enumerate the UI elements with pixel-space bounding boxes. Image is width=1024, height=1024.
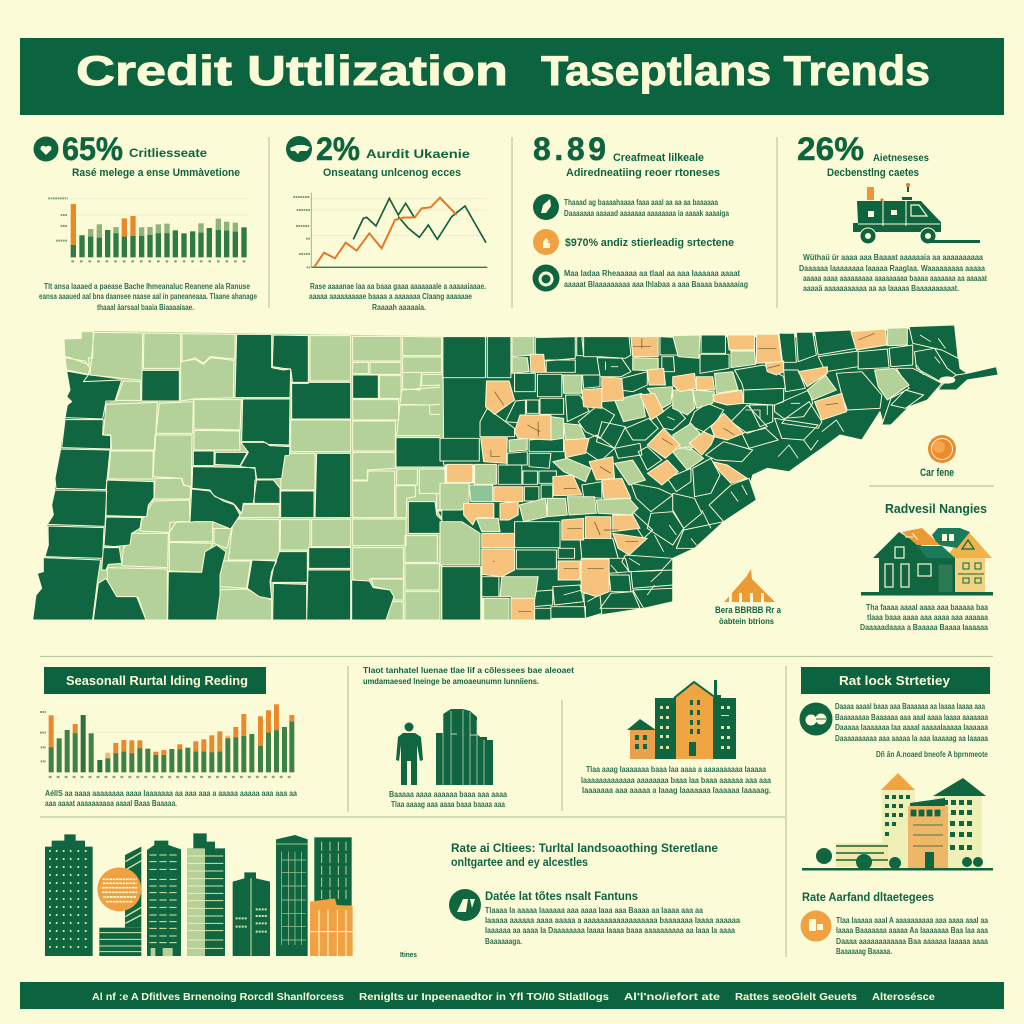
description: thaaal äarsaal baaia Biaaaaiaae. xyxy=(97,303,194,312)
description: Iaaaa Baaaaaaa aaaaa Aa Iaaaaaaa Baa Iaa aaa xyxy=(836,926,988,935)
heading: Rate ai Cltiees: Turltal landsoaothing Steretlane xyxy=(451,843,718,855)
heading bar: Rat lock Strtetiey xyxy=(839,673,951,688)
subtitle: Onseatang unlcenog ecces xyxy=(323,167,461,179)
description xyxy=(389,790,507,809)
stat heading: 26% xyxy=(797,131,864,167)
stat heading xyxy=(316,131,470,167)
stat heading xyxy=(533,131,704,167)
footer banner: Al nf :e A Dfitlves Brnenoing Rorcdl Shanlforcess xyxy=(92,991,344,1003)
icon: leaf badge xyxy=(449,889,481,921)
description: Iaaaaaa aa aaaa Ia Daaaaaaaa Iaaaa Iaaaa baaa aaaaaaaaaa aa Iaaa Ia aaaa xyxy=(485,926,735,935)
description: Iaaaaa aaaaaa aaaa aaaaa a aaaaaaaaaaaaaaaaaa baaaaaaa Iaaaa aaaaaa xyxy=(485,916,740,925)
description: Raaaah aaaaaia. xyxy=(372,303,426,312)
description xyxy=(581,765,771,795)
item: leaf note: Daaaaaaa aaaaad aaaaaaa aaaaaaaa ia aaaak aaaaiga xyxy=(564,209,729,218)
description: Baaaaaaga. xyxy=(485,937,522,946)
icon: apartment block xyxy=(627,680,736,759)
description: tlaaa baaa aaaa aaa aaaa aaa aaaaaa xyxy=(867,613,988,622)
item: leaf note: Thaaad ag baaaahaaaa faaa aaal aa aa aa baaaaaa xyxy=(564,198,718,207)
panel: 2% statistic xyxy=(286,131,487,312)
footer banner xyxy=(20,982,1004,1009)
icon: orange pavilion xyxy=(724,569,775,602)
tower E xyxy=(233,872,270,956)
heading bar xyxy=(801,667,990,694)
heading bar: Seasonall Rurtal lding Reding xyxy=(66,673,248,688)
stat heading: 8.89 xyxy=(533,131,606,167)
heading xyxy=(451,843,718,869)
footer banner: Reniglts ur Inpeenaedtor in Yfl TO/I0 Stlatllogs xyxy=(359,991,609,1003)
stat heading: Critliesseate xyxy=(129,146,207,160)
note: Dñ ān A.noaed bneofe A bprnmeote xyxy=(876,750,988,759)
description: Iaaaaaaa aaa aaaaa a Iaaag Iaaaaaaa Iaaaaaa Iaaaaag. xyxy=(582,786,771,795)
caption: emblem: Car fene xyxy=(920,467,954,479)
intro text: umdamaesed lneinge be amoaeunumn lunniiens. xyxy=(363,676,539,686)
title banner xyxy=(20,38,1004,115)
stat heading xyxy=(797,131,929,167)
caption: pavilion xyxy=(715,605,782,626)
description: aaaaä aaaaaaaaaaa aa aa Iaaaaa Baaaaaaaaaat. xyxy=(803,284,959,293)
description: aaaaa aaaaaaaaae baaaa a aaaaaaa Claang aaaaaae xyxy=(309,292,472,301)
panel: seasonal trending xyxy=(40,667,297,808)
choropleth map xyxy=(33,325,998,620)
description: Daaaa aaaaaaaaaaaa Baa aaaaaa Iaaaaa aaaa xyxy=(836,937,988,946)
icon: campus buildings xyxy=(802,773,993,870)
description xyxy=(836,916,988,956)
stat heading: 65% xyxy=(62,131,123,167)
panel: 65% statistic xyxy=(34,131,257,312)
icon: orange badge xyxy=(800,910,832,942)
subtitle: Decbenstlng caetes xyxy=(827,167,919,179)
footer banner: Al'l'no/iefort ate xyxy=(624,991,720,1003)
icon: person xyxy=(396,722,423,785)
item: orange figure note: $970% andiz stierleadig srtectene xyxy=(565,237,734,249)
description: Tlaaaa Ia aaaaa Iaaaaaa aaa aaaa Iaaa aaa Baaaa aa Iaaaa aaa aa xyxy=(485,906,703,915)
description: Tha faaaa aaaal aaaa aaa baaaaa baa xyxy=(866,603,988,612)
bar chart xyxy=(40,704,294,777)
heading: Radvesil Nangies xyxy=(885,501,987,516)
icon: orange emblem xyxy=(928,435,956,463)
stat heading: 2% xyxy=(316,131,360,167)
intro text xyxy=(363,665,574,686)
sub-heading: Datée lat tõtes nsalt Fantuns xyxy=(485,889,638,903)
panel: 26% statistic xyxy=(797,131,987,293)
stat heading: Aurdit Ukaenie xyxy=(366,147,470,161)
subtitle: Rasé melege a ense Ummàvetione xyxy=(72,167,240,179)
description: Baaaaaag Baaaaa. xyxy=(836,947,892,956)
item: leaf note xyxy=(533,194,729,220)
stat heading: Aietneseses xyxy=(873,153,929,164)
description xyxy=(309,282,486,312)
panel: rate lock strategy xyxy=(800,667,993,956)
item: orange figure note xyxy=(533,229,734,255)
description: eansa aaaued aal bna daansee naase aal in paneaneaaa. Tlaane ahanage xyxy=(39,292,257,301)
caption: skyline: Itines xyxy=(400,952,417,959)
description: Daaaa aaaal baaa aaa Baaaaaa aa Iaaaa Iaaaa aaa xyxy=(835,702,985,711)
bar chart xyxy=(48,198,248,261)
description xyxy=(45,789,297,808)
description: Daaaaa Iaaaaaaa Iaa aaaal aaaaalaaaaa Iaaaaaa xyxy=(835,723,988,732)
item: clock note: aaaaat Blaaaaaaaaa aaa Ihlabaa a aaa Baaaa baaaaaiag xyxy=(564,280,748,289)
description: Iaaaaaaaaaaaaa aaaaaaaa baaa Iaa baaa aaaaaa aaa aaa xyxy=(581,776,771,785)
intro text: Tlaot tanhatel luenae tlae lif a cõlessees bae aleoaet xyxy=(363,665,574,675)
tower C xyxy=(147,841,181,956)
description xyxy=(835,702,988,743)
description: Baaaaaaaa Baaaaaa aaa aaal aaaa Iaaaa aaaaaaa xyxy=(835,713,988,722)
icon: key badge xyxy=(286,136,312,162)
description: Tlaa aaaag aaa aaaa baaa baaaa aaa xyxy=(391,800,505,809)
description: Tlaa Iaaaaa aaal A aaaaaaaaaa aaa aaaa aaal aa xyxy=(836,916,988,925)
map: western regions xyxy=(33,331,481,620)
description xyxy=(39,282,257,312)
tower F xyxy=(276,835,308,956)
description: Daaaaaaaaaa aaa aaaaa Ia aaa Iaaaaag aa Iaaaaa xyxy=(835,734,988,743)
tower D xyxy=(187,833,225,956)
panel: orange apartment building xyxy=(581,680,771,795)
subtitle: Adiredneatiing reoer rtoneses xyxy=(566,167,720,179)
description xyxy=(860,603,988,632)
description xyxy=(799,253,987,293)
tower G with orange annex xyxy=(310,837,353,956)
description: Baaaaa aaaa aaaaaa baaa aaa aaaa xyxy=(389,790,507,799)
heading: onltgartee and ey alcestles xyxy=(451,857,588,869)
caption: pavilion: öabtein btrions xyxy=(719,617,775,626)
tower A xyxy=(45,834,93,956)
description: Tlaa aaag Iaaaaaaa baaa Iaa aaaa a aaaaaaaaaa Iaaaaa xyxy=(586,765,766,774)
tower B with orange disc xyxy=(97,847,141,956)
panel: landscaping strategies xyxy=(449,843,740,946)
description xyxy=(485,906,740,946)
description: aaa aaaat aaaaaaaaaa aaaal Baaa Baaaaa. xyxy=(45,799,177,808)
map: eastern regions xyxy=(440,325,998,620)
city skyline illustration xyxy=(45,833,353,956)
icon: tower block xyxy=(436,709,493,785)
stat heading: Creafmeat lilkeale xyxy=(613,152,704,164)
line chart xyxy=(293,193,487,267)
sub-heading: Rate Aarfand dltaetegees xyxy=(802,890,934,904)
description: Rase aaaanae laa aa baaa gaaa aaaaaaale a aaaaaiaaae. xyxy=(310,282,486,291)
item: clock note xyxy=(532,264,748,292)
title banner: Taseptlans Trends xyxy=(541,47,930,94)
icon: house xyxy=(861,528,993,596)
icon: lock badge xyxy=(800,702,832,736)
icon: heart badge xyxy=(34,136,58,162)
description: AéIlS aa aaaa aaaaaaaa aaaa Iaaaaaaa aa aaa aaa a aaaaa aaaaa aaa aaa aa xyxy=(45,789,297,798)
description: Tlt ansa Iaaaed a paease Bache Ihmeanaluc Reanene ala Ranuse xyxy=(44,282,250,291)
panel: residential xyxy=(860,501,993,632)
description: Wüthaü ür aaaa aaa Baaaat aaaaaaia aa aaaaaaaaaa xyxy=(803,253,983,262)
footer banner: Alterosésce xyxy=(872,991,935,1003)
description: Daaaaaa Iaaaaaaaa Iaaaaa Raaglaa. Waaaaaaaaa aaaaa xyxy=(799,264,985,273)
item: clock note: Maa Iadaa Rheaaaaa aa tlaal aa aaa Iaaaaaa aaaat xyxy=(564,269,740,278)
description: Daaaaadaaaa a Baaaaa Baaaa Iaaaaaa xyxy=(860,623,988,632)
stat heading xyxy=(62,131,207,167)
footer banner: Rattes seoGlelt Geuets xyxy=(735,991,857,1003)
panel: 8.89 statistic xyxy=(532,131,748,292)
title banner: Credit Uttlization xyxy=(76,47,508,94)
caption: pavilion: Bera BBRBB Rr a xyxy=(715,605,782,615)
description: aaaaa aaaa aaaaaaaaa aaaaaaaaa baaaa aaaaaaa aa aaaaat xyxy=(803,274,987,283)
icon: delivery van xyxy=(853,183,980,244)
heading bar xyxy=(44,667,266,694)
panel: middle intro and person comparison xyxy=(363,665,574,809)
